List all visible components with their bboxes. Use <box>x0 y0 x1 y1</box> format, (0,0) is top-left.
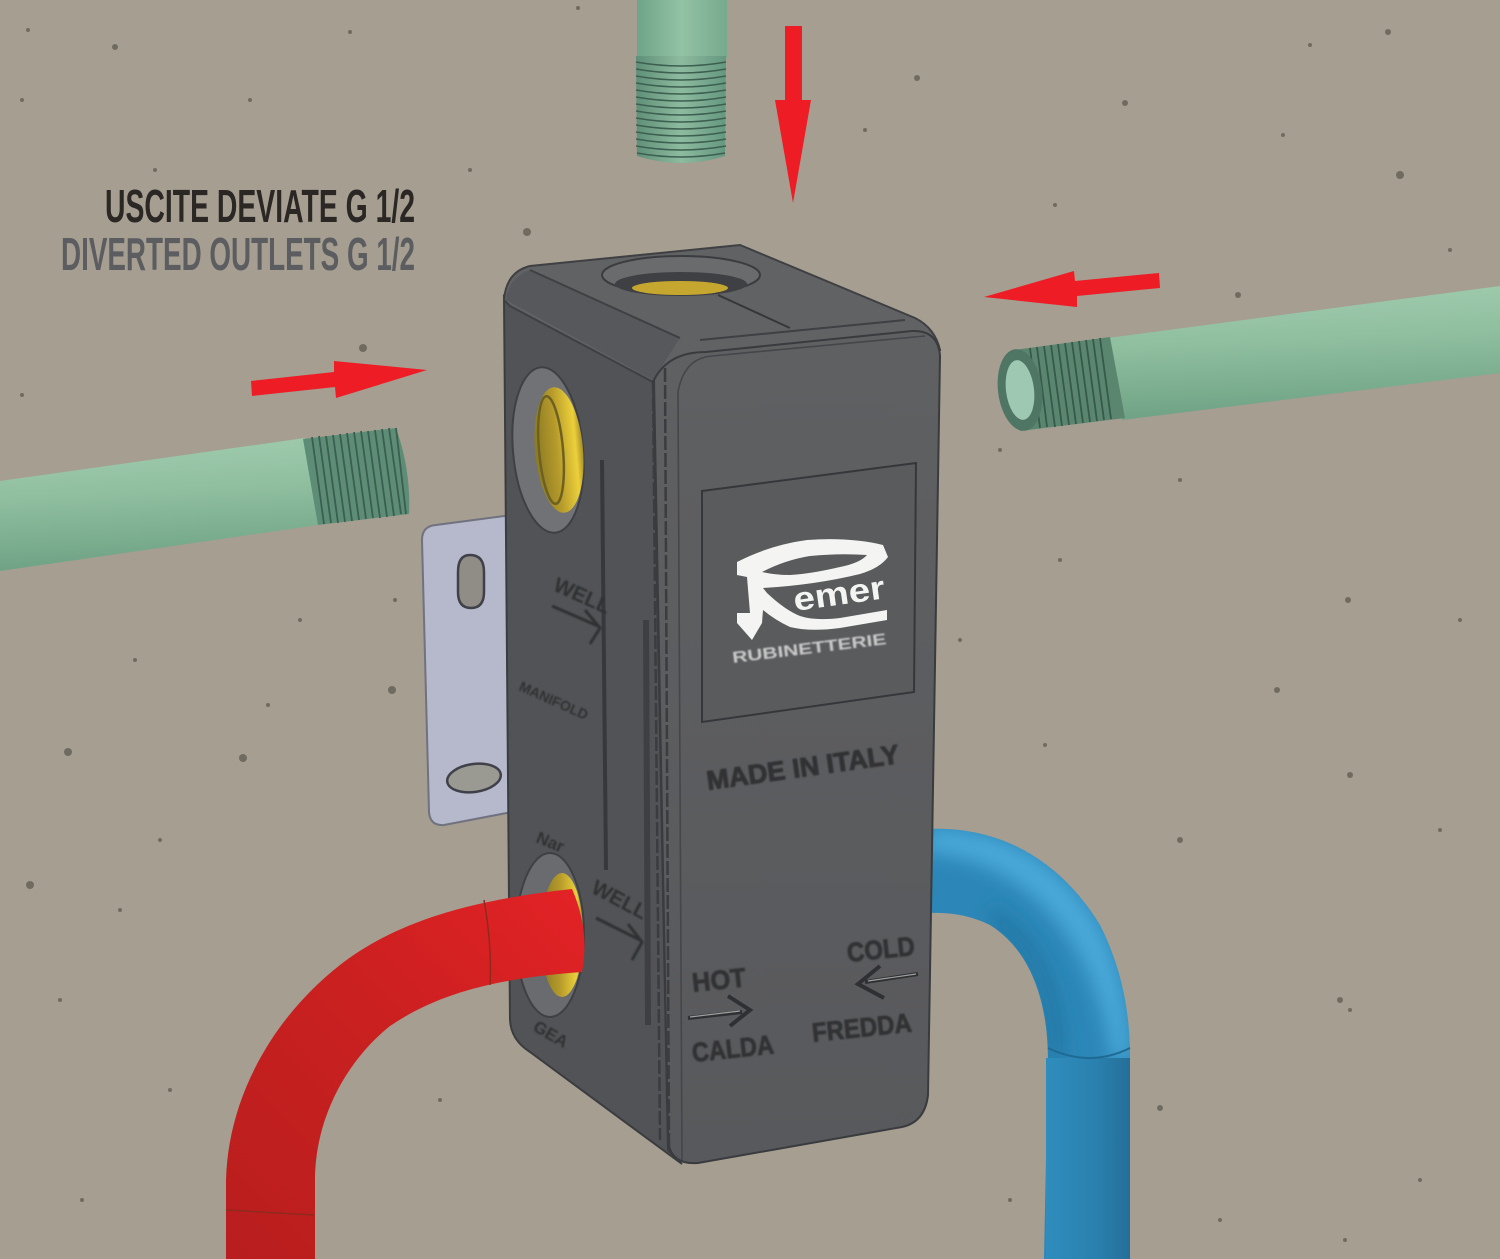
mounting bracket <box>422 515 512 825</box>
caption <box>61 180 415 280</box>
side markings <box>517 574 651 1052</box>
logo plate <box>702 463 916 722</box>
side markings: WELL <box>550 574 614 619</box>
left lower outlet <box>516 853 584 1017</box>
pipe: top green <box>636 0 727 163</box>
top outlet <box>602 256 760 296</box>
side markings: GEA <box>530 1017 571 1052</box>
hot marking: HOT <box>690 962 748 998</box>
hot marking: CALDA <box>690 1030 775 1068</box>
pipe: right green <box>993 286 1500 433</box>
side markings: WELL <box>588 876 651 924</box>
arrow: left pointing right <box>251 361 427 398</box>
box: left side face <box>504 296 682 1164</box>
left upper outlet <box>506 364 590 536</box>
box: front face <box>654 331 940 1163</box>
side markings: MANIFOLD <box>517 678 591 723</box>
arrow: right pointing left <box>984 271 1160 307</box>
cold marking: COLD <box>845 931 916 968</box>
logo wordmark: emer <box>791 568 887 618</box>
hot marking <box>688 962 775 1068</box>
pipe: blue cold water <box>925 829 1130 1259</box>
pipe: red hot water <box>226 889 584 1259</box>
box: rounded top-left bevel <box>506 270 680 380</box>
caption: Italian: USCITE DEVIATE G 1/2 <box>105 180 415 232</box>
side markings: Nar <box>534 828 567 856</box>
logo mark <box>737 539 888 640</box>
pipe: left green <box>0 428 409 571</box>
arrow: top down <box>775 26 811 203</box>
made in italy marking: MADE IN ITALY <box>705 739 901 796</box>
valve box <box>504 245 940 1164</box>
caption: English: DIVERTED OUTLETS G 1/2 <box>61 228 415 280</box>
box: top face <box>504 245 940 382</box>
cold marking: FREDDA <box>810 1008 913 1048</box>
logo subtitle: RUBINETTERIE <box>731 631 888 667</box>
cold marking <box>810 931 918 1048</box>
